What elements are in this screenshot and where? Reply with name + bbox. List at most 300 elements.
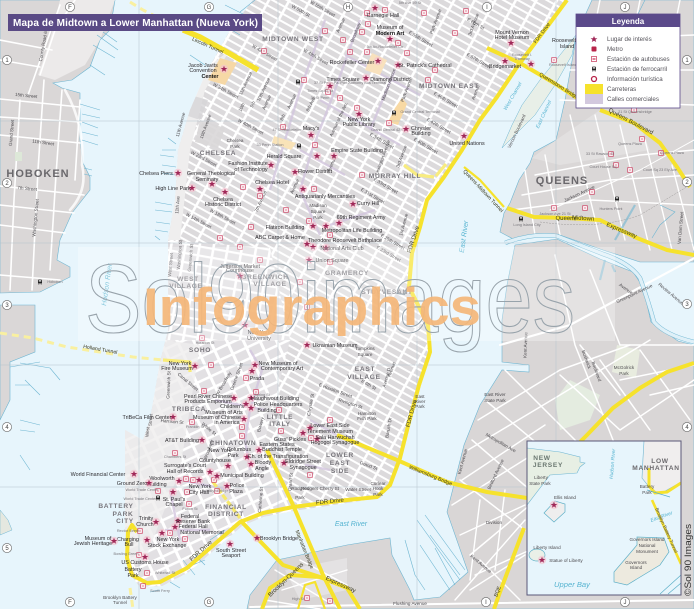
credit: ©Sol 90 Images: [683, 524, 694, 596]
park labels: [103, 138, 635, 605]
grid reference circles: F: [68, 5, 72, 11]
district names: [6, 36, 588, 525]
district names: SOHO: [189, 347, 211, 354]
street names: W 34th Street: [212, 82, 240, 100]
Newtown Creek: [505, 235, 694, 342]
inset label: Low Manhattan: [632, 458, 680, 472]
landmark: Macy's: [303, 126, 320, 139]
district names: BATTERY: [98, 503, 134, 510]
street names: 10th: [237, 102, 246, 112]
small station captions: Chambers St: [164, 455, 187, 459]
landmark: Empire State Building: [330, 148, 383, 160]
water names: West Channel: [503, 81, 524, 112]
landmark: Brooklyn Bridge: [253, 534, 298, 542]
landmark: Prada: [248, 367, 264, 382]
inset road: Brooklyn Battery Tunnel: [652, 500, 681, 564]
landmark: New York University: New York: [248, 330, 271, 336]
street names: Grand St: [287, 472, 294, 491]
street names: 10th Avenue: [256, 76, 271, 102]
landmark: Jacob Javits Center: Center: [201, 74, 219, 80]
landmark: South Street Seaport: Seaport: [222, 553, 241, 559]
landmark: St. Patrick's Cathedral: [394, 61, 452, 69]
street names: Greenpoint Avenue: [616, 283, 654, 304]
inset label: Hudson River: Hudson River: [609, 448, 617, 479]
landmark: Roosevelt Island tram: [512, 53, 535, 68]
street names: Jackson Avenue: [563, 184, 596, 203]
landmark: Surrogate's Court Hall of Records: [164, 463, 214, 476]
street names: E 34th Street: [369, 132, 395, 150]
water names: East River: [459, 220, 470, 253]
legend item: Lugar de interés: Lugar de interés: [607, 36, 652, 43]
label: Island: Island: [560, 44, 574, 50]
inset landmark: Ellis Island: [550, 495, 576, 509]
inset land: Lower Manhattan: [642, 441, 681, 494]
landmark: High Line Park: [155, 184, 196, 192]
small station captions: 37 St Penn Pa. Port Authority Bus Terminal: [314, 81, 386, 85]
street names: 10th Avenue: [199, 113, 212, 139]
street names: 1st Avenue: [398, 213, 409, 236]
street names: Kent Avenue: [523, 331, 528, 358]
landmark: Carnegie Hall: Carnegie Hall: [367, 13, 399, 19]
road labels: Lincoln Tunnel: [191, 37, 224, 56]
landmark: Museum of Modern Art: Modern Art: [376, 31, 404, 37]
street names: 11th Ave: [174, 196, 181, 214]
street names: E 46th Street: [433, 91, 459, 109]
watermark lightening band: [78, 247, 615, 341]
landmark: Surrogate's Court Hall of Records: Surrogate's Court: [164, 463, 207, 469]
inset label: Battery Park: Battery: [640, 484, 655, 489]
landmark: Bridgemarket: Bridgemarket: [489, 64, 522, 70]
inset label: New Jersey: [533, 455, 563, 469]
label: Charging Bull: Charging: [117, 537, 139, 543]
legend panel: [576, 14, 680, 108]
street names: E 40th Street: [413, 137, 439, 155]
grid reference circles: H: [346, 5, 350, 11]
landmark: Rockefeller Center: Rockefeller Center: [330, 60, 375, 66]
landmark: New York Stock Exchange: New York: [157, 537, 180, 543]
landmark: Columbus Park and Church of the Transfiguration: Columbus: [227, 447, 251, 453]
inset label: Upper Bay: Upper Bay: [554, 580, 591, 589]
landmark: Bloody Angle: Bloody: [255, 460, 272, 466]
landmark: Eastern States Buddhist Temple: Buddhist Temple: [262, 447, 302, 453]
street names: Metropolitan Ave: [485, 432, 517, 454]
district names: DISTRICT: [208, 511, 244, 518]
landmark: US Custom House: [121, 553, 169, 566]
small station captions: 5th Ave 59 St: [399, 1, 422, 5]
landmark: Fashion Institute of Technology: of Technology: [234, 167, 268, 173]
landmark: Police Headquarters Building: [247, 402, 303, 414]
road labels: Queensboro Bridge: [538, 72, 579, 101]
landmark: Municipal Building: [213, 472, 264, 480]
district names: ITALY: [269, 421, 291, 428]
street names: Bedford Avenue: [486, 458, 505, 490]
road labels: Holland Tunnel: [83, 344, 118, 356]
landmark: Chelsea Historic District: Chelsea: [213, 197, 233, 203]
park labels: Square: [358, 352, 373, 357]
title banner: Mapa de Midtown a Lower Manhattan (Nueva York): [13, 18, 258, 29]
landmark: Children's Museum of Arts: Museum of Arts: [205, 410, 243, 416]
label: Battery Park: [124, 567, 142, 579]
street names: Rivington St: [338, 397, 364, 410]
road labels: Expressway: [324, 576, 356, 594]
landmark: Bialystoker Synagogue: Hogogol Synagogue: [311, 440, 359, 446]
street names: Street: [147, 413, 154, 426]
landmark: Flower District: Flower District: [298, 169, 333, 175]
landmark: Museum of Chinese in America: in America: [214, 420, 240, 426]
landmark: South Street Seaport: South Street: [216, 548, 246, 554]
landmark: Flower District: [291, 168, 333, 176]
street names: Avenue: [261, 94, 272, 110]
district names: QUEENS: [536, 175, 588, 187]
land: New Jersey and Hoboken: [0, 0, 115, 535]
small station captions: Queens Plaza: [660, 151, 685, 155]
landmark: AT&T Building: [165, 436, 206, 444]
label: Charging Bull: Bull: [124, 542, 134, 548]
street names: 3rd Avenue: [467, 12, 480, 36]
street names: 9th: [249, 100, 256, 108]
landmark: Eastern States Buddhist Temple: [255, 442, 302, 454]
street names: Greenwich St: [187, 243, 194, 272]
landmark: New York City Hall: City Hall: [189, 490, 209, 496]
landmark: Ground Zero: [117, 479, 153, 487]
landmark: Chelsea Historic District: [205, 188, 241, 208]
landmark: Bridgemarket: [489, 57, 522, 70]
district names: WEST: [177, 276, 199, 283]
landmark: Federal Hall National Memorial: Federal Hall: [178, 524, 208, 530]
park labels: Tompkins: [355, 346, 375, 351]
inset label: New Jersey: JERSEY: [533, 462, 563, 469]
watermark: Sol90 images outline: Sol90images: [85, 244, 575, 353]
street names: Washington Street: [31, 198, 40, 237]
inset label: Low Manhattan: LOW: [651, 458, 669, 465]
landmark: Jefferson Market Courthouse: [220, 264, 261, 280]
landmark: Columbus Park and Church of the Transfiguration: [227, 447, 308, 461]
street names: W 14th Street: [185, 212, 213, 230]
legend item: Estación de ferrocarril: Estación de ferrocarril: [607, 66, 667, 73]
inset label: Liberty State Park: State Park: [529, 481, 551, 486]
landmark: US Custom House: US Customs House: [121, 560, 169, 566]
street names: 8th Ave: [305, 96, 316, 112]
district names: GRAMERCY: [325, 270, 369, 277]
landmark: Herald Square: [267, 152, 321, 160]
small station captions: Grand Central 42 St: [371, 128, 406, 132]
landmark: Haughwout Building: Haughwout Building: [251, 396, 299, 402]
landmark: Lower East Side Tenement Museum: Tenement Museum: [307, 429, 353, 435]
landmark: Federal Hall National Memorial: [158, 523, 224, 537]
street names: Park Avenue: [429, 8, 443, 35]
street names: Madison Avenue: [380, 67, 397, 101]
inset land: Ellis Island: [544, 501, 565, 522]
landmark: New York County Courthouse: Countyhouse: [199, 458, 231, 464]
landmark: High Line Park: High Line Park: [155, 186, 191, 192]
landmark: Museum of Jewish Heritage: [74, 536, 118, 547]
rail station icons: [38, 80, 619, 500]
street names: Flushing Avenue: [393, 601, 427, 606]
landmark: New Museum of Contemporary Art: New Museum of: [259, 361, 298, 367]
road labels: Brooklyn-Queens: [268, 562, 305, 599]
landmark: Antiquarian Mercantiles: Antiquarianly Mercantiles: [295, 194, 355, 200]
park labels: McGolrick: [614, 365, 635, 370]
small station captions: Court House Sq: [589, 165, 617, 169]
land: Roosevelt Island: [502, 35, 576, 148]
inset brooklyn piers: [647, 490, 681, 594]
small station captions: Grand Central Terminal: [400, 110, 440, 114]
landmark: Museum of Modern Art: Museum of: [377, 25, 404, 31]
inset label: New Jersey: NEW: [533, 455, 551, 462]
landmark: United Nations: United Nations: [449, 141, 485, 147]
landmark: Pearl River Chinese Products Emporium: Pearl River Chinese: [184, 394, 232, 400]
street names: Bowery: [256, 416, 265, 433]
legend item: Metro: Metro: [607, 46, 623, 53]
street names: Avenue: [326, 156, 337, 172]
legend item: Estación de autobuses: Estación de autobuses: [607, 56, 670, 63]
landmark: Columbus Park and Church of the Transfiguration: Park: [227, 453, 239, 459]
inset landmark: Ellis Island: Ellis Island: [554, 495, 576, 500]
landmark: Macy's: Macy's: [303, 126, 320, 132]
street names: E 31st Street: [360, 187, 386, 205]
street names: Grand Street: [8, 119, 15, 146]
road labels: Queens: [555, 216, 577, 222]
district names: CHELSEA: [200, 150, 236, 157]
street names: E 25th Street: [380, 233, 406, 251]
grid reference circles: J: [624, 5, 626, 11]
park labels: Square: [311, 209, 326, 214]
legend header: Leyenda: [612, 17, 645, 26]
road labels: [83, 22, 654, 599]
inset label: Liberty State Park: [529, 475, 551, 486]
grid reference circles: 1: [5, 58, 9, 64]
small station captions: World Trade Center: [125, 488, 159, 492]
landmark: TriBeCa Film Center: [123, 413, 177, 421]
street names: W 18th Street: [209, 208, 237, 226]
small station captions: Fulton St: [182, 507, 199, 511]
landmark: ABC Carpet and Home: [255, 235, 311, 248]
watermark: Infographics: Infographics: [143, 278, 481, 337]
landmark: 69th Regiment Armory: [335, 215, 386, 227]
landmark: Museum of Jewish Heritage: Museum of: [85, 536, 112, 542]
district names: LITTLE: [267, 414, 293, 421]
landmark: Bloody Angle: [247, 460, 272, 472]
landmark: TriBeCa Film Center: TriBeCa Film Center: [123, 415, 172, 421]
grid reference circles: I: [485, 600, 487, 606]
inset label: Battery Park: [640, 484, 655, 495]
grid reference circles: 5: [5, 546, 9, 552]
street names: E 55th Street: [408, 30, 434, 48]
landmark: South Street Seaport: [216, 540, 246, 559]
park labels: East: [415, 394, 425, 399]
inset landmark: Statue of Liberty: Statue of Liberty: [549, 558, 583, 563]
street names: Baruch Dr: [384, 417, 393, 438]
landmark: United Nations: [449, 132, 485, 147]
grid reference circles: G: [207, 600, 212, 606]
landmark: Theodore Roosevelt Birthplace: [308, 238, 382, 251]
road labels: Expressway: [605, 222, 637, 240]
small station captions: 33 Penn Station: [256, 143, 284, 147]
small station captions: Times Sq-42 St: [307, 89, 334, 93]
street names: Kent Avenue: [457, 448, 468, 475]
water names: East River: [335, 521, 368, 528]
landmark: Chelsea Piers: Chelsea Piers: [139, 171, 173, 177]
street names: Avenue: [618, 282, 634, 296]
street names: W 50th St: [291, 3, 311, 18]
inset land: Liberty Island: [529, 549, 545, 561]
landmark: Federal Reserve Bank: Federal: [181, 514, 199, 520]
street names: 15th Street: [15, 92, 38, 99]
landmark: Ground Zero: Ground Zero: [117, 481, 147, 487]
inset road: FDR: [649, 468, 681, 493]
landmark: ABC Carpet and Home: ABC Carpet & Home: [255, 235, 305, 241]
landmark: St. Paul's Chapel: Chapel: [165, 502, 183, 508]
landmark: Ukrainian Museum: Ukrainian Museum: [313, 343, 358, 349]
landmark: New Museum of Contemporary Art: Contemporary Art: [261, 366, 304, 372]
street names: 11th Street: [32, 138, 55, 147]
landmark: Guss' Pickles: [274, 429, 307, 443]
landmark: Jacob Javits Center: Convention: [189, 68, 217, 74]
street names: W Broadway: [215, 370, 233, 396]
park labels: Park: [373, 492, 383, 497]
landmark: New Museum of Contemporary Art: [251, 361, 304, 372]
street names: Review Avenue: [657, 282, 685, 306]
landmark: New York Fire Museum: New York: [169, 361, 192, 367]
landmark: Roosevelt Island tram: Tramway: [514, 57, 530, 61]
road labels: Williamsburg Bridge: [408, 465, 453, 488]
road labels: Queens-Midtown Tunnel: [461, 169, 504, 214]
district names: EAST: [355, 366, 375, 373]
road labels: BQE: [493, 585, 503, 598]
landmark: Haughwout Building: [247, 394, 299, 402]
street names: E 33rd Street: [373, 177, 399, 195]
street names: E Houston Street: [318, 382, 353, 399]
landmark: Carnegie Hall: [367, 4, 399, 19]
street names: West: [145, 426, 151, 437]
street names: County Road 675: [38, 25, 49, 62]
road labels: FDR Drive: [316, 497, 345, 506]
inset label: Liberty State Park: Liberty: [534, 475, 549, 480]
grid reference circles: 3: [685, 302, 689, 308]
landmark: Brooklyn Bridge: Brooklyn Bridge: [260, 536, 298, 542]
landmark: Bialystoker Synagogue: Sala Harwuchsh: [315, 435, 355, 441]
landmark: Lower East Side Tenement Museum: Lower East Side: [310, 423, 350, 429]
street names: 8th: [279, 113, 286, 121]
landmark: Bloody Angle: Angle: [255, 466, 269, 472]
landmark: Diamond District: [362, 74, 410, 83]
street names: Catherine St: [257, 486, 264, 513]
landmark: New York University: University: [247, 336, 271, 342]
legend item: Carreteras: Carreteras: [607, 86, 636, 93]
road labels: FDR Drive: [407, 225, 421, 254]
landmark: Woolworth Building: Building: [147, 482, 167, 488]
small station captions: Jackson Ave 21 St: [539, 212, 572, 216]
street names: Vernon Boulevard: [507, 113, 527, 149]
small station captions: Spring St: [254, 393, 271, 397]
landmark: Flatiron Building: Flatiron Building: [266, 225, 304, 231]
street names: Avenue D: [382, 367, 392, 388]
park labels: State Park: [484, 398, 506, 403]
street names: 7th Street: [17, 185, 38, 192]
landmark: Guss' Pickles: Guss' Pickles: [274, 437, 306, 443]
park labels: Rodgers: [291, 486, 309, 491]
landmark: Jefferson Market Courthouse: Jefferson Market: [220, 264, 261, 270]
street names: W 49th Street: [302, 48, 330, 66]
district names: VILLAGE: [253, 281, 287, 288]
landmark: Mount Vernon Hotel Museum: Mount Vernon: [495, 30, 529, 36]
inset label: Governors Island National Monument: Governors Island: [630, 537, 665, 542]
landmark: Mount Vernon Hotel Museum: Hotel Museum: [495, 35, 530, 41]
small station captions: South Ferry: [150, 589, 170, 593]
label: Charging Bull: [117, 537, 139, 548]
landmark: Trinity Church: Trinity: [139, 516, 154, 522]
inset landmark: Statue of Liberty: [533, 545, 583, 564]
park labels: Corlear: [370, 481, 386, 486]
landmark: Fashion Institute of Technology: Fashion Institute: [228, 161, 268, 167]
road labels: FDR Drive: [189, 539, 214, 563]
metro and bus markers: [137, 8, 663, 603]
inset label: Governors Island National Monument: [630, 537, 665, 554]
landmark: Roosevelt Island tram: Roosevelt I.: [512, 53, 532, 57]
park labels: Chelsea: [227, 138, 244, 143]
street names: W 40th Street: [237, 118, 265, 136]
landmark: Woolworth Building: [147, 476, 183, 488]
small station captions: 33 St Rawson St: [586, 152, 615, 156]
landmark: New York County Courthouse: [199, 448, 232, 470]
landmark: Jefferson Market Courthouse: Courthouse: [226, 268, 254, 274]
street names: E 42th Street: [426, 117, 452, 135]
inset label: Governors Island: [625, 560, 647, 570]
landmark: Jacob Javits Center: [188, 63, 228, 80]
park labels: East River: [484, 392, 506, 397]
legend item: Información turística: Información turística: [607, 76, 663, 83]
landmark: Times Square: Times Square: [326, 77, 360, 83]
grid reference circles: I: [486, 5, 488, 11]
landmark: Chrysler Building: [402, 125, 431, 137]
small station captions: Bowling Green: [114, 552, 138, 556]
label: Battery Park: Battery: [124, 567, 142, 573]
park labels: Tunnel: [113, 600, 127, 605]
district names: VILLAGE: [169, 283, 203, 290]
landmark: Children's Museum of Arts: Children's: [220, 404, 244, 410]
park labels: Madison: [309, 203, 327, 208]
landmark: General Theological Seminary: Seminary: [196, 177, 219, 183]
landmark: New York County Courthouse: New York: [209, 448, 232, 454]
inset landmark: Statue of Liberty: Liberty Island: [533, 545, 561, 550]
street names: Avenue: [289, 178, 300, 194]
grid reference circles: F: [68, 600, 72, 606]
landmark: Police Plaza: [223, 482, 244, 495]
water names: Hudson River: [101, 263, 114, 306]
small station captions: Franklin St: [186, 425, 205, 429]
park labels: Hamilton: [358, 411, 377, 416]
landmark: Diamond District: Diamond District: [370, 77, 410, 83]
street names: Grand St: [359, 460, 379, 471]
landmark: St. Patrick's Cathedral: St. Patrick's Cathedral: [398, 63, 452, 69]
landmark: Eldridge Street Synagogue: Synagogue: [289, 465, 317, 471]
land: Brooklyn: [247, 239, 694, 609]
landmark: Trinity Church: [136, 516, 160, 528]
landmark: Federal Reserve Bank: Reserve Bank: [176, 519, 210, 525]
landmark: Curry Hill: Curry Hill: [357, 201, 379, 207]
landmark: Prada: Prada: [250, 376, 264, 382]
park labels: Park: [619, 371, 629, 376]
district names: GREENWICH: [241, 274, 289, 281]
street names: Washington St: [176, 239, 183, 270]
street names: Rodgers Cherry St: [301, 486, 340, 491]
landmark: 69th Regiment Armory: 69th Regiment Army: [337, 215, 386, 221]
street names: E 6th St: [360, 378, 378, 391]
landmark: Eldridge Street Synagogue: [280, 459, 321, 471]
landmark: Trinity Church: Church: [136, 522, 154, 528]
landmark: Times Square: [326, 77, 360, 90]
landmark: New York Stock Exchange: [143, 536, 186, 549]
